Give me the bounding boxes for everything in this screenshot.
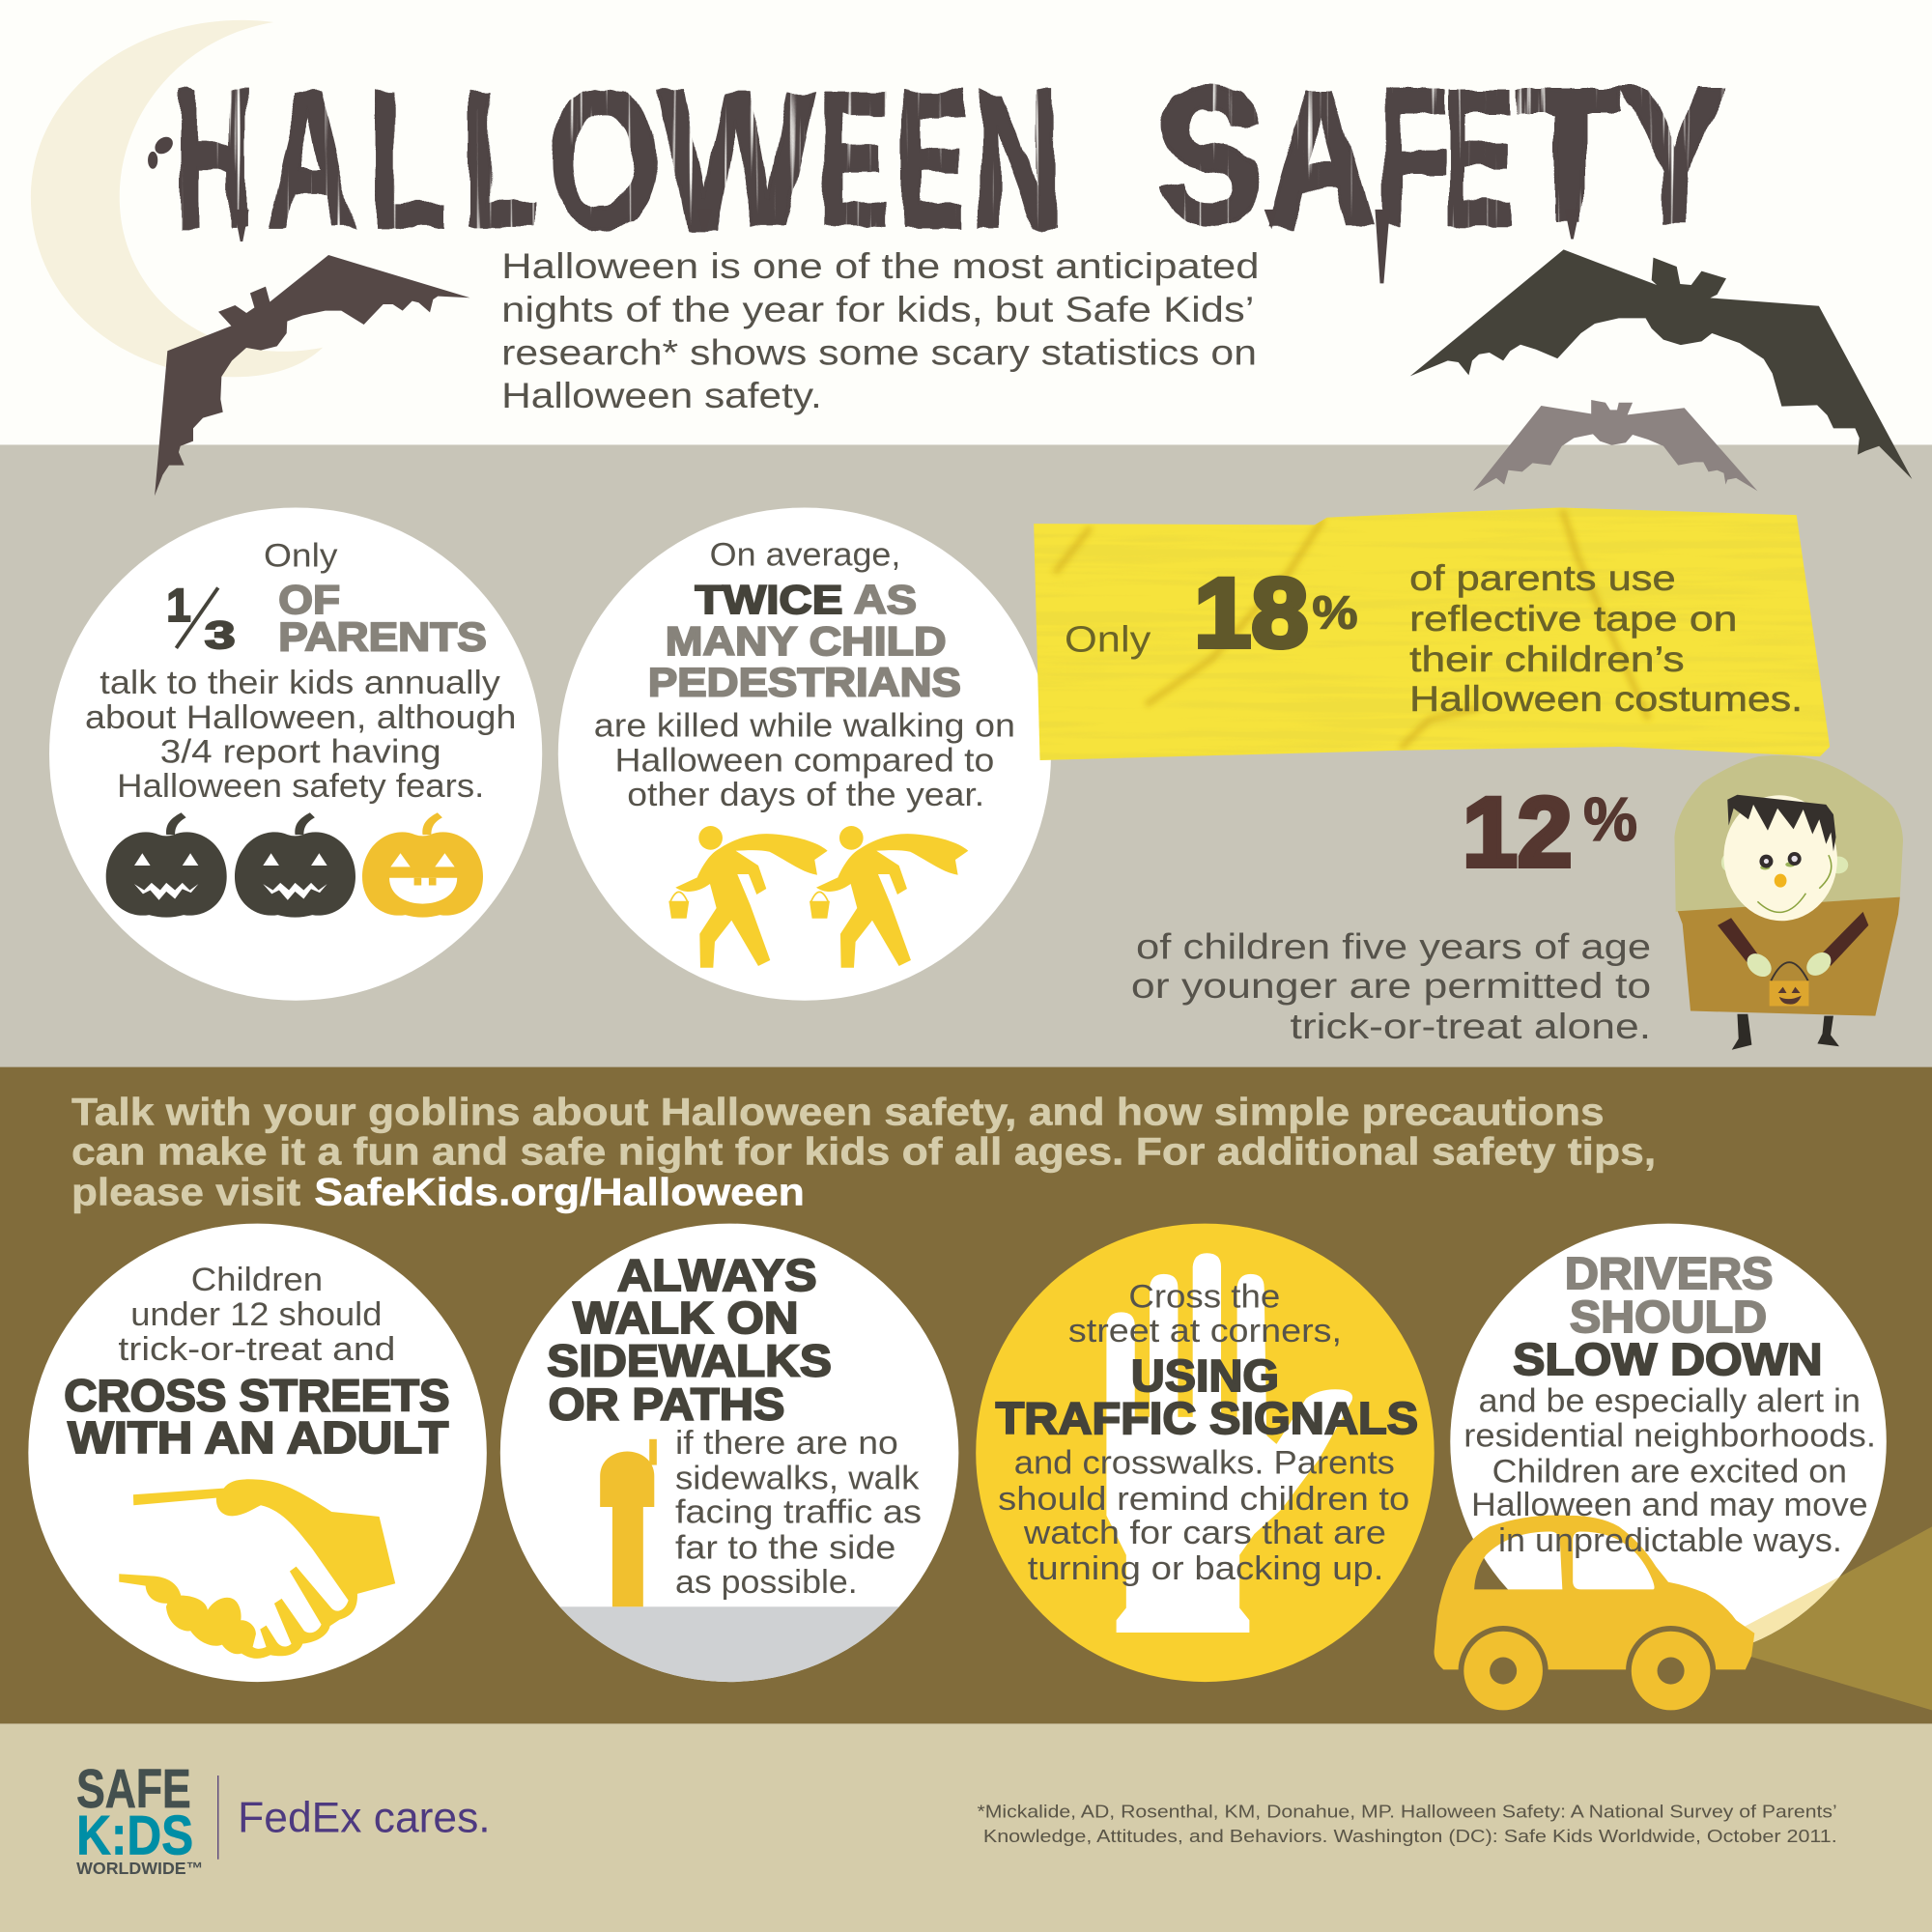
text: only: Only: [264, 538, 338, 575]
body text: if there are no: [675, 1425, 898, 1462]
body text: other days of the year.: [627, 777, 984, 813]
heading: ALWAYS: [617, 1250, 817, 1300]
heading: [64, 1370, 450, 1463]
callout: talk with your goblins: [71, 1092, 1656, 1213]
headlight beam: [1748, 1526, 1932, 1710]
title: H: [171, 52, 254, 267]
stat: 18 percent: 18: [1194, 558, 1309, 668]
circle background: [558, 508, 1051, 1001]
stat: 12 percent: %: [1583, 784, 1637, 854]
tape text: Halloween costumes.: [1409, 679, 1803, 719]
logo: Safe Kids Worldwide: K:DS: [76, 1805, 193, 1867]
body text: talk to their kids annually: [99, 665, 501, 701]
heading: TRAFFIC SIGNALS: [996, 1393, 1418, 1443]
heading: [648, 577, 961, 705]
panel: drivers should slow down: [1435, 1224, 1932, 1716]
title: [171, 50, 1727, 267]
footnote citation: *Mickalide, AD, Rosenthal, KM, Donahue, MP. Halloween Safety: A National Survey of Parents’: [977, 1801, 1837, 1821]
title: S: [1155, 50, 1264, 265]
body text: and be especially alert in: [1479, 1383, 1861, 1420]
heading: [996, 1350, 1418, 1443]
circle background: [500, 1224, 958, 1682]
title: A: [265, 52, 356, 267]
icon: large right bat: [1410, 249, 1912, 479]
heading: WALK ON: [573, 1293, 799, 1343]
body text: [1131, 926, 1651, 1046]
icon: caped child walking: [668, 826, 828, 968]
tape text: [1409, 558, 1803, 719]
body text: 3/4 report having: [160, 734, 441, 771]
callout: talk with your goblins: SafeKids.org/Halloween: [314, 1171, 805, 1213]
body text: street at corners,: [1068, 1313, 1342, 1350]
text: only: Only: [1065, 619, 1151, 661]
heading: [1513, 1248, 1822, 1384]
stat: 12 percent: [1463, 778, 1637, 888]
body text: of children five years of age: [1136, 926, 1651, 966]
callout: talk with your goblins: Talk with your goblins about Halloween safety, and how simple precautions: [71, 1092, 1605, 1134]
body text: should remind children to: [998, 1481, 1409, 1518]
body text: watch for cars that are: [1023, 1515, 1386, 1551]
title: E: [1444, 50, 1513, 265]
icon: yellow car: [1435, 1515, 1754, 1716]
body text: under 12 should: [130, 1296, 382, 1333]
title: Y: [1622, 50, 1727, 265]
body text: facing traffic as: [675, 1494, 922, 1531]
body text: [1068, 1278, 1342, 1350]
body text: in unpredictable ways.: [1498, 1522, 1842, 1559]
body text: and crosswalks. Parents: [1014, 1445, 1395, 1482]
panel: reflective tape statistic: [1023, 499, 1842, 770]
section: header background: [0, 0, 1932, 444]
yellow tape: [1023, 499, 1842, 770]
callout: talk with your goblins: please visit: [71, 1171, 300, 1213]
logo: Safe Kids Worldwide: SAFE: [76, 1758, 191, 1819]
title: W: [659, 52, 813, 267]
body text: Cross the: [1128, 1278, 1280, 1315]
section: footer background: [0, 1723, 1932, 1932]
heading: SIDEWALKS: [547, 1336, 832, 1386]
icon: dark pumpkin: [106, 812, 227, 918]
title: L: [464, 52, 540, 267]
stat: 18 percent: [1194, 558, 1358, 668]
title: A: [1266, 50, 1375, 265]
heading: MANY CHILD: [666, 618, 947, 664]
body text: sidewalks, walk: [675, 1460, 920, 1496]
body text: turning or backing up.: [1028, 1550, 1383, 1587]
icon: white stop hand: [1106, 1253, 1352, 1633]
body text: Halloween and may move: [1471, 1487, 1868, 1523]
title: O: [543, 52, 662, 267]
body text: [594, 708, 1015, 813]
body text: [85, 665, 516, 805]
body text: or younger are permitted to: [1131, 966, 1651, 1006]
circle background: [1450, 1224, 1887, 1660]
heading: AS: [854, 577, 917, 622]
footnote citation: [977, 1801, 1837, 1846]
icon: left bat: [155, 255, 470, 496]
tape text: of parents use: [1409, 558, 1676, 598]
icon: yellow pumpkin: [362, 812, 483, 918]
body text: are killed while walking on: [594, 708, 1015, 745]
intro text: [501, 246, 1260, 415]
title: E: [897, 52, 969, 267]
body text: [998, 1445, 1409, 1587]
icon: adult and child handshake: [119, 1479, 395, 1659]
body text: trick-or-treat and: [118, 1331, 395, 1368]
icon: caped child walking: [810, 826, 968, 968]
intro text: Halloween is one of the most anticipated: [501, 246, 1260, 286]
heading: WITH AN ADULT: [68, 1412, 448, 1463]
body text: as possible.: [675, 1564, 858, 1601]
logo: Safe Kids Worldwide: WORLDWIDE™: [76, 1859, 203, 1878]
title: T: [1516, 50, 1624, 265]
body text: Halloween compared to: [614, 742, 994, 779]
body text: residential neighborhoods.: [1463, 1417, 1876, 1454]
heading: SHOULD: [1570, 1292, 1767, 1342]
footnote citation: Knowledge, Attitudes, and Behaviors. Washington (DC): Safe Kids Worldwide, October 2011.: [983, 1826, 1837, 1846]
logo: FedEx cares: FedEx cares.: [238, 1795, 491, 1842]
icon: mailbox: [600, 1439, 657, 1606]
body text: trick-or-treat alone.: [1290, 1007, 1651, 1046]
heading: PEDESTRIANS: [648, 660, 961, 705]
heading: of parents: [278, 577, 487, 659]
icon: dark pumpkin: [235, 812, 355, 918]
intro text: research* shows some scary statistics on: [501, 333, 1257, 373]
body text: Halloween safety fears.: [117, 768, 484, 805]
heading: OR PATHS: [549, 1378, 784, 1429]
body text: [118, 1262, 395, 1368]
body text: Children are excited on: [1492, 1453, 1847, 1490]
title drips and splatter: [148, 133, 1579, 283]
tape text: reflective tape on: [1409, 599, 1737, 639]
heading: USING: [1131, 1350, 1279, 1401]
section: tips background: [0, 1067, 1932, 1723]
tape text: their children’s: [1409, 639, 1685, 679]
section: statistics background: [0, 444, 1932, 1067]
title: N: [974, 52, 1062, 267]
icon: child in monster costume: [1674, 755, 1903, 1050]
panel: using traffic signals: [976, 1224, 1435, 1682]
body text: far to the side: [675, 1530, 895, 1567]
title: E: [818, 52, 890, 267]
heading: of parents: PARENTS: [278, 613, 487, 659]
stat: one third fraction: 1: [166, 580, 191, 632]
heading: DRIVERS: [1565, 1248, 1773, 1298]
body text: [675, 1425, 922, 1601]
intro text: Halloween safety.: [501, 376, 822, 415]
heading: [547, 1250, 832, 1429]
panel: one third of parents: [49, 508, 542, 1001]
logo divider: [217, 1776, 219, 1860]
stat: one third fraction: 3: [205, 614, 236, 657]
panel: walk on sidewalks: [493, 1224, 974, 1693]
body text: Children: [191, 1262, 323, 1298]
circle background: [49, 508, 542, 1001]
intro text: nights of the year for kids, but Safe Kids’: [501, 290, 1254, 329]
icon: small grey bat: [1473, 400, 1757, 491]
body text: [1463, 1383, 1876, 1559]
heading: of parents: OF: [278, 577, 340, 622]
headlight glow: [1745, 1577, 1839, 1642]
panel: twice as many child pedestrians: [558, 508, 1051, 1001]
panel: cross streets with an adult: [28, 1224, 487, 1682]
circle background: [976, 1224, 1435, 1682]
stat: one third fraction: [166, 580, 236, 657]
title: F: [1375, 50, 1449, 265]
heading: TWICE: [695, 577, 842, 622]
title: L: [370, 52, 446, 267]
heading: CROSS STREETS: [64, 1370, 450, 1420]
heading: SLOW DOWN: [1513, 1334, 1822, 1384]
stat: 12 percent: 12: [1463, 778, 1573, 888]
text: on average: On average,: [710, 536, 900, 573]
panel: 12 percent statistic: [1131, 755, 1903, 1050]
circle background: [28, 1224, 487, 1682]
logo: Safe Kids Worldwide: [76, 1758, 203, 1878]
body text: about Halloween, although: [85, 699, 516, 736]
callout: talk with your goblins: can make it a fun and safe night for kids of all ages. For additional safety tips,: [71, 1130, 1656, 1173]
icon: crescent moon: [31, 20, 323, 377]
sidewalk ground: [559, 1606, 898, 1683]
stat: 18 percent: %: [1312, 587, 1358, 639]
